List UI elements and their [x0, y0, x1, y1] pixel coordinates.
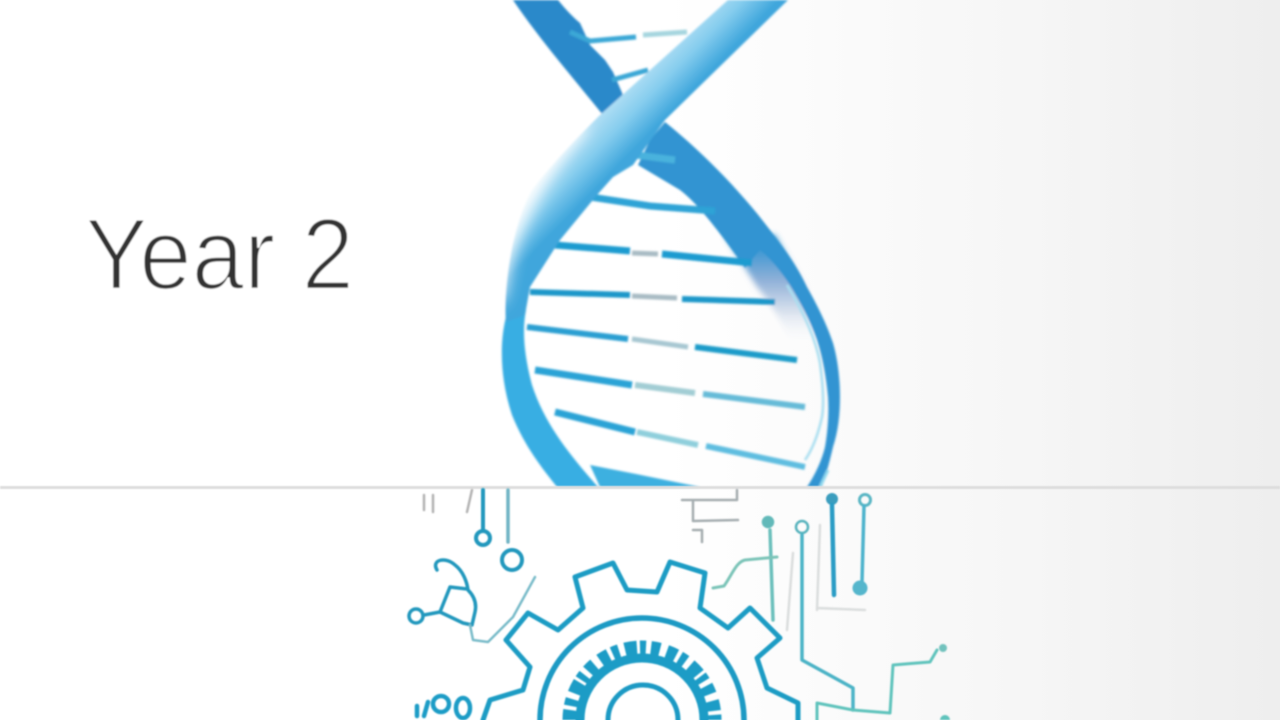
back strand right [638, 122, 840, 487]
bottom left nodes [417, 696, 470, 718]
circuit traces right [713, 494, 950, 720]
title: Year 2 [85, 199, 354, 311]
circuit gear illustration [409, 490, 950, 720]
grey bracket trace [682, 490, 738, 542]
inner grey fade of right strand [725, 235, 818, 345]
top left nodes [424, 490, 522, 570]
front strand lower crescent [502, 300, 598, 487]
molecule circuit [409, 560, 535, 642]
gear outline [483, 562, 798, 720]
back strand upper [513, 0, 623, 115]
gear inner ring [608, 685, 678, 720]
cyan thin strand at bottom right [820, 470, 828, 487]
strand outer fade [490, 120, 578, 300]
pale inner line of right strand [787, 285, 823, 460]
gear toothed ring base [580, 658, 704, 720]
front strand upper [505, 0, 788, 322]
DNA helix illustration [490, 0, 840, 487]
rung bottom [590, 465, 700, 487]
gear toothed ring [570, 648, 714, 720]
gear outer ring [540, 618, 744, 720]
rungs [527, 32, 805, 467]
horizontal divider [0, 486, 1280, 489]
